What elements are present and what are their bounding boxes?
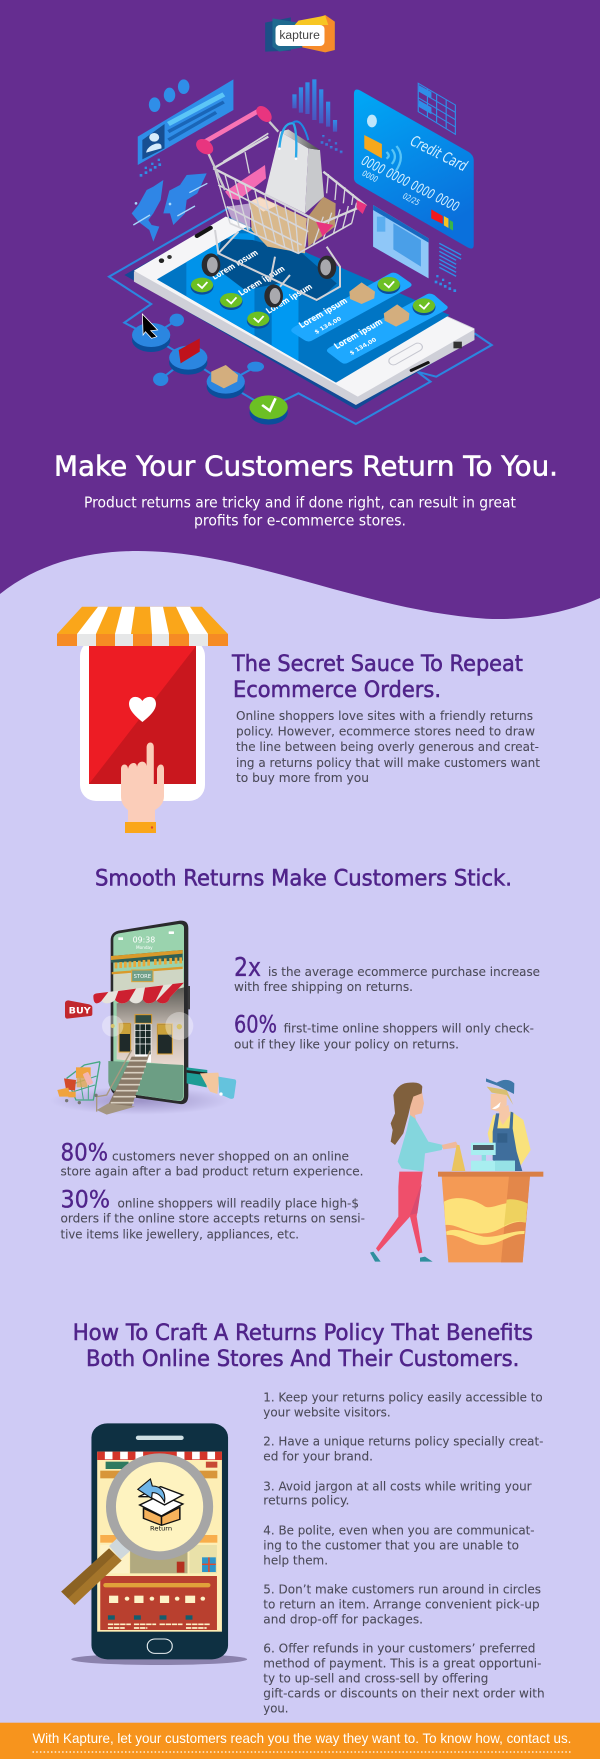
text block: secret sauce body: the line between being overly generous and creat- — [236, 740, 539, 755]
stat: 60%: first-time online shoppers will only check- — [284, 1022, 534, 1037]
credit card: 02/25 — [400, 192, 421, 208]
illustration: phone with magnifier and return box — [61, 1423, 247, 1665]
product panels: $ 134,00 — [314, 316, 343, 336]
tip 5: and drop-off for packages. — [263, 1613, 423, 1628]
tip 6 — [263, 1642, 545, 1717]
flow nodes — [132, 314, 288, 425]
tip 6: 6. Offer refunds in your customers’ preferred — [263, 1642, 535, 1657]
customer — [370, 1082, 459, 1262]
tip 5: 5. Don’t make customers run around in circles — [263, 1583, 541, 1598]
stat: 60%: 60% — [234, 1011, 277, 1039]
stat: 2x: 2x — [234, 953, 261, 983]
smartphone — [124, 217, 476, 409]
screen labels — [210, 249, 315, 316]
stat: 2x — [234, 953, 540, 995]
profile panel with dots — [138, 79, 233, 177]
heading: smooth returns: Smooth Returns Make Customers Stick. — [95, 867, 512, 892]
text block: secret sauce body — [236, 709, 540, 786]
buy tag — [65, 1000, 92, 1019]
tip 1: 1. Keep your returns policy easily accessible to — [263, 1391, 543, 1406]
tip 6: ty to up-sell and cross-sell by offering — [263, 1672, 488, 1687]
credit card: 0000 — [360, 169, 380, 185]
stat: 60%: out if they like your policy on returns. — [234, 1038, 459, 1053]
buy tag: BUY — [69, 1007, 91, 1017]
heading: craft a returns policy: How To Craft A Returns Policy That Benefits — [73, 1321, 533, 1346]
stat: 30% — [60, 1186, 365, 1243]
subtitle: profits for e-commerce stores. — [194, 511, 406, 529]
main title: Make Your Customers Return To You. — [54, 451, 558, 483]
screen labels: Lorem ipsum — [210, 249, 261, 282]
return box icon — [138, 1479, 183, 1533]
tip 4: 4. Be polite, even when you are communicat- — [263, 1524, 535, 1539]
header purple background with wave — [0, 0, 600, 619]
tip 2: 2. Have a unique returns policy specially creat- — [263, 1435, 543, 1450]
stat: 80% — [60, 1139, 364, 1180]
tip 5: to return an item. Arrange convenient pick-up — [263, 1598, 540, 1613]
tip 2: ed for your brand. — [263, 1450, 373, 1465]
credit card — [354, 90, 474, 249]
heading: craft a returns policy: Both Online Stores And Their Customers. — [86, 1347, 519, 1372]
stat: 60% — [234, 1011, 534, 1053]
heading: secret sauce: Ecommerce Orders. — [233, 678, 441, 703]
stat: 30%: online shoppers will readily place high-$ — [118, 1197, 359, 1212]
awning — [57, 607, 228, 646]
circuit lines — [109, 207, 492, 424]
footer call-to-action bar: With Kapture, let your customers reach you the way they want to. To know how, contact us. — [32, 1730, 571, 1746]
tip 6: gift-cards or discounts on their next order with — [263, 1687, 545, 1702]
illustration: phone storefront: STORE — [134, 974, 151, 980]
stat: 2x: is the average ecommerce purchase increase — [268, 965, 540, 980]
tip 3 — [263, 1480, 532, 1509]
stat: 30%: 30% — [60, 1186, 110, 1214]
check buttons — [191, 277, 435, 329]
tip 4: help them. — [263, 1554, 328, 1569]
heart — [129, 697, 156, 722]
illustration: customer and cashier at counter — [370, 1078, 543, 1262]
logo: kapture: kapture — [279, 28, 320, 42]
product panels — [291, 273, 448, 364]
tip 6: method of payment. This is a great opportuni- — [263, 1657, 542, 1672]
product panels: Lorem ipsum — [333, 318, 385, 352]
hand — [121, 742, 164, 822]
illustration: phone storefront: Monday — [136, 945, 153, 950]
tip 4: ing to the customer that you are unable to — [263, 1539, 519, 1554]
tip 3: returns policy. — [263, 1494, 349, 1509]
icon: storefront tablet with heart and pointing hand — [57, 607, 228, 833]
small interface panel — [373, 205, 429, 278]
return box icon: Return — [150, 1525, 172, 1533]
cash register — [471, 1143, 515, 1171]
text block: secret sauce body: policy. However, ecommerce stores need to draw — [236, 724, 535, 739]
heading: secret sauce: The Secret Sauce To Repeat — [231, 652, 523, 677]
product panels: $ 134,00 — [349, 337, 378, 357]
shopping cart — [193, 103, 367, 308]
footer call-to-action bar — [0, 1723, 600, 1759]
paper bag — [452, 1145, 465, 1171]
screen labels: Lorem ipsum — [237, 265, 287, 298]
cashier — [486, 1078, 531, 1171]
world map — [132, 173, 207, 242]
tip 1 — [263, 1391, 543, 1421]
logo: kapture — [265, 15, 335, 52]
stat: 30%: orders if the online store accepts returns on sensi- — [60, 1212, 365, 1227]
subtitle — [84, 493, 516, 529]
stat: 30%: tive items like jewellery, appliances, etc. — [60, 1228, 299, 1243]
text block: secret sauce body: to buy more from you — [236, 771, 369, 786]
stat: 80%: store again after a bad product return experience. — [60, 1165, 364, 1180]
illustration: phone storefront — [50, 921, 236, 1115]
tip 3: 3. Avoid jargon at all costs while writing your — [263, 1480, 532, 1495]
counter — [438, 1172, 543, 1262]
illustration: phone storefront: 09:38 — [133, 934, 155, 944]
magnifying glass — [61, 1457, 209, 1605]
screen labels: Lorem ipsum — [264, 283, 315, 316]
heading: craft a returns policy — [73, 1321, 533, 1372]
product panels: Lorem ipsum — [297, 297, 350, 331]
heading: secret sauce — [231, 652, 523, 703]
text lines graphic — [439, 243, 461, 276]
stat: 80%: 80% — [60, 1139, 108, 1167]
credit card: Credit Card — [407, 132, 471, 175]
tip 5 — [263, 1583, 541, 1628]
subtitle: Product returns are tricky and if done right, can result in great — [84, 493, 516, 511]
stat: 2x: with free shipping on returns. — [234, 980, 413, 995]
tip 2 — [263, 1435, 543, 1465]
small cart with boxes — [57, 1062, 100, 1104]
text block: secret sauce body: Online shoppers love sites with a friendly returns — [236, 709, 533, 724]
tip 6: you. — [263, 1702, 288, 1717]
tip 1: your website visitors. — [263, 1406, 391, 1421]
stat: 80%: customers never shopped on an online — [112, 1150, 349, 1165]
hero illustration: isometric phone, cart and credit card — [109, 79, 492, 425]
numbered list: returns policy tips — [263, 1391, 545, 1717]
calendar graphic — [418, 83, 455, 134]
credit card: 0000 0000 0000 0000 — [358, 154, 462, 215]
text block: secret sauce body: ing a returns policy that will make customers want — [236, 756, 540, 771]
tip 4 — [263, 1524, 535, 1569]
bar chart graphic — [292, 79, 342, 153]
